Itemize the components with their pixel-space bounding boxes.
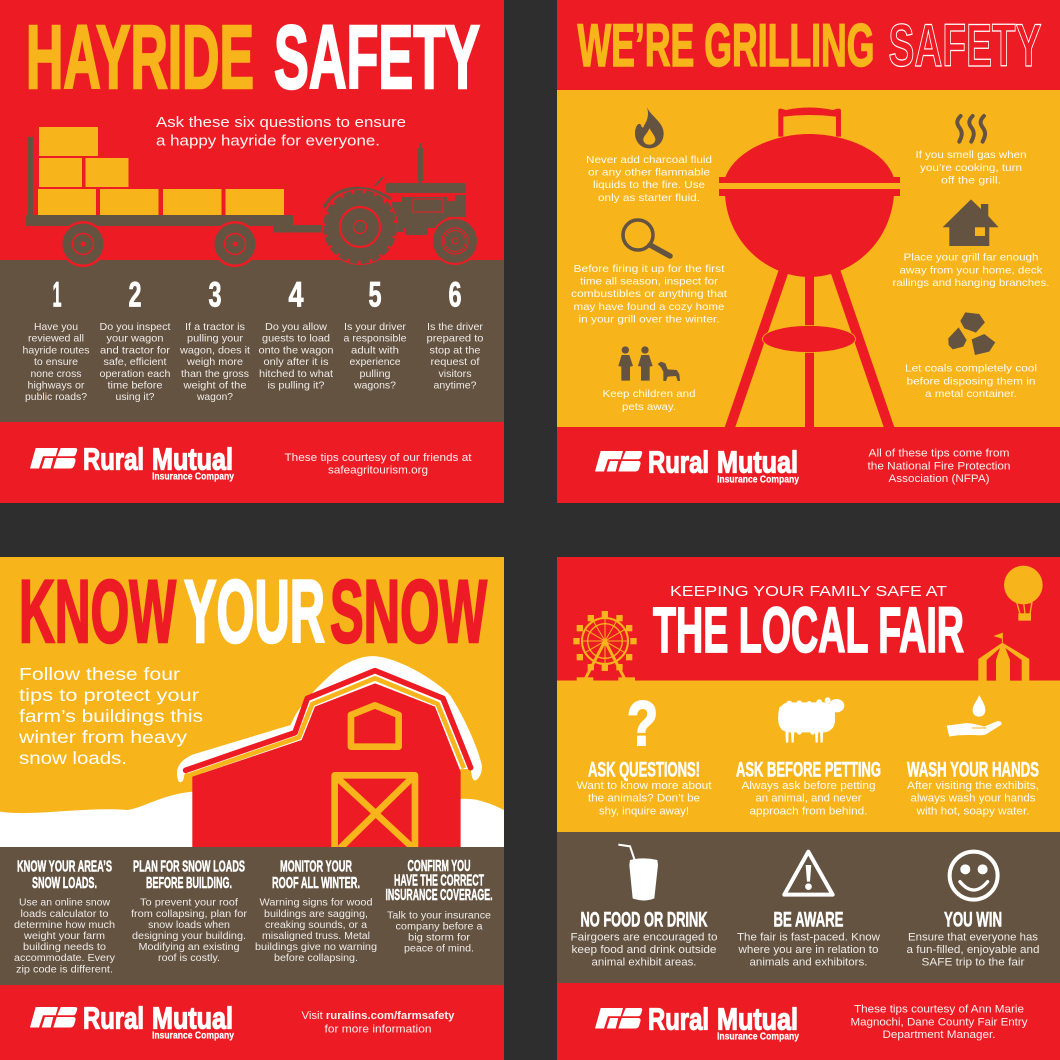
tip: you win: SAFE trip to the fair	[922, 956, 1025, 968]
intro text	[18, 664, 203, 768]
tip 4: insurance coverage: CONFIRM YOU	[408, 858, 470, 875]
tip: smell gas: you’re cooking, turn	[920, 162, 1022, 174]
tip: ask before petting: approach from behind.	[750, 806, 868, 818]
tip 3: monitor roof: buildings give no warning	[255, 942, 377, 953]
tip: inspect grill	[571, 263, 727, 325]
numbers	[52, 276, 462, 314]
snow on roof	[177, 656, 482, 782]
tip 1: snow loads	[14, 858, 115, 975]
tip: charcoal fluid: liquids to the fire. Use	[593, 179, 705, 191]
title: know your snow: SNOW	[330, 561, 487, 661]
question 1: hayride routes	[22, 345, 90, 356]
question 3: than the gross	[181, 369, 249, 380]
title: know your snow: KNOW	[19, 561, 176, 661]
question 4: hitched to what	[259, 369, 333, 380]
grill legs	[729, 270, 890, 430]
tip 3: monitor roof: misaligned truss. Metal	[262, 931, 370, 942]
tip: children and pets: Keep children and	[602, 388, 696, 400]
six numbered questions	[22, 276, 484, 403]
tip 3: monitor roof: buildings are sagging,	[264, 909, 368, 920]
title: hayride safety: HAYRIDE	[26, 8, 254, 108]
tip: no food or drink: animal exhibit areas.	[592, 956, 696, 968]
tip: be aware: where you are in relation to	[737, 944, 878, 956]
tip 1: snow loads: weight your farm	[23, 931, 105, 942]
tip: wash your hands: After visiting the exhibits,	[907, 780, 1039, 792]
wagon	[26, 137, 323, 267]
footer credit: Department Manager.	[882, 1029, 996, 1041]
tip 1: snow loads: determine how much	[14, 920, 115, 931]
tip: children and pets	[602, 388, 696, 413]
logo: rural mutual: Insurance Company	[717, 474, 799, 486]
tip: coals	[905, 363, 1037, 400]
footer link	[302, 1010, 455, 1035]
numbers: 1	[52, 276, 62, 314]
loft window	[351, 705, 399, 747]
question 5: a responsible	[344, 334, 407, 345]
tip: ask before petting	[736, 758, 881, 818]
question 1: Have you	[34, 322, 78, 333]
icon: children and dog	[618, 346, 680, 381]
title: hayride safety: SAFETY	[274, 8, 480, 108]
tip: coals: a metal container.	[925, 388, 1017, 400]
tip: inspect grill: Before firing it up for the first	[574, 263, 725, 275]
footer credit	[850, 1004, 1028, 1041]
question 2: your wagon	[106, 334, 164, 345]
logo: rural mutual: Insurance Company	[152, 1030, 234, 1042]
tip 2: plan for snow loads: from collapsing, plan for	[131, 909, 248, 920]
footer credit: These tips courtesy of Ann Marie	[854, 1004, 1024, 1016]
tip: wash your hands: with hot, soapy water.	[915, 806, 1030, 818]
tip: inspect grill: may have found a cozy home	[574, 301, 725, 313]
tip: ask before petting: Always ask before petting	[742, 780, 876, 792]
question 2: using it?	[116, 392, 155, 403]
question 6	[426, 322, 484, 392]
question 3: wagon, does it	[179, 345, 250, 356]
question 1: public roads?	[25, 392, 87, 403]
question 6: stop at the	[430, 345, 481, 356]
tip: charcoal fluid: only as starter fluid.	[598, 192, 700, 204]
tip 4: insurance coverage: company before a	[396, 921, 483, 932]
question 3: If a tractor is	[185, 322, 245, 333]
grill lid and bowl	[719, 134, 900, 277]
tip 1: snow loads: Use an online snow	[19, 898, 111, 909]
question 4: Do you allow	[265, 322, 328, 333]
tip 3: monitor roof: MONITOR YOUR	[280, 858, 352, 876]
tip: smell gas	[916, 149, 1027, 186]
title: know your snow	[19, 561, 487, 661]
tip 1: snow loads: KNOW YOUR AREA’S	[17, 858, 112, 876]
intro text: Follow these four	[19, 664, 180, 684]
tip 1: snow loads: SNOW LOADS.	[32, 875, 97, 892]
footer credit: Magnochi, Dane County Fair Entry	[850, 1016, 1028, 1028]
tip: inspect grill: combustibles or anything that	[571, 288, 727, 300]
question 1	[22, 322, 90, 403]
tip 4: insurance coverage: INSURANCE COVERAGE.	[386, 887, 492, 904]
logo: rural mutual: Rural	[83, 442, 144, 476]
title: know your snow: YOUR	[184, 561, 325, 661]
question 5: Is your driver	[344, 322, 407, 333]
tip 1: snow loads: zip code is different.	[16, 964, 113, 975]
tip 1: snow loads: building needs to	[23, 942, 106, 953]
intro text: snow loads.	[19, 748, 127, 768]
footer credit: Association (NFPA)	[888, 473, 990, 485]
roof stripes	[190, 678, 464, 775]
tip: children and pets: pets away.	[622, 401, 676, 413]
tip: ask before petting: an animal, and never	[756, 793, 862, 805]
tip: be aware: BE AWARE	[774, 908, 844, 932]
numbers: 2	[128, 276, 142, 314]
question 2	[100, 322, 171, 403]
heading: KEEPING YOUR FAMILY SAFE AT	[670, 583, 947, 600]
tip 2: plan for snow loads: Modifying an existing	[138, 942, 240, 953]
tip: no food or drink	[570, 908, 718, 968]
panel: local fair	[557, 557, 1060, 1060]
numbers: 6	[448, 276, 462, 314]
tip: you win: Ensure that everyone has	[908, 932, 1039, 944]
tip: charcoal fluid: or any other flammable	[588, 167, 710, 179]
panel: hayride safety	[0, 0, 504, 503]
subtitle	[156, 115, 406, 150]
tip: ask questions: shy, inquire away!	[599, 806, 689, 818]
logo: rural mutual: Insurance Company	[717, 1032, 799, 1042]
tip 3: monitor roof: Warning signs for wood	[260, 898, 372, 909]
logo: rural mutual	[30, 442, 234, 482]
tip 2: plan for snow loads: designing your building.	[132, 931, 246, 942]
question 5: pulling	[360, 369, 391, 380]
tip 4: insurance coverage: Talk to your insurance	[387, 910, 491, 921]
logo: rural mutual	[595, 446, 799, 486]
tip: ask questions	[576, 758, 712, 818]
tip: coals: Let coals completely cool	[905, 363, 1037, 375]
subtitle: a happy hayride for everyone.	[156, 134, 380, 150]
icon: cup with straw	[618, 845, 658, 900]
tip 2: plan for snow loads: roof is costly.	[158, 953, 220, 964]
barn in snow	[0, 656, 504, 848]
icon: flame	[635, 107, 664, 148]
question 6: Is the driver	[427, 322, 484, 333]
question 4	[258, 322, 334, 392]
hay bales	[38, 127, 284, 215]
tip: charcoal fluid	[586, 154, 712, 204]
footer link: Visit ruralins.com/farmsafety	[302, 1010, 455, 1022]
tip 1: snow loads: loads calculator to	[20, 909, 108, 920]
tip 2: plan for snow loads: To prevent your roof	[140, 898, 238, 909]
tip: inspect grill: in your grill over the winter.	[578, 313, 720, 325]
tip: ask questions: ASK QUESTIONS!	[588, 758, 700, 782]
logo: rural mutual: Insurance Company	[152, 472, 234, 482]
tip 2: plan for snow loads: snow loads when	[148, 920, 230, 931]
numbers: 3	[208, 276, 222, 314]
footer credit	[284, 452, 472, 476]
logo: rural mutual: Rural	[648, 446, 709, 480]
tip: place grill	[892, 252, 1050, 289]
footer link: for more information	[324, 1023, 432, 1035]
footer credit: the National Fire Protection	[868, 460, 1010, 472]
panel: grilling safety	[557, 0, 1060, 503]
icon: sheep	[778, 697, 844, 743]
question 1: none cross	[30, 369, 82, 380]
barn body	[192, 683, 461, 847]
tip: coals: before disposing them in	[906, 375, 1036, 387]
tip 2: plan for snow loads	[131, 858, 248, 964]
question 5	[344, 322, 407, 392]
tip: wash your hands: always wash your hands	[910, 793, 1036, 805]
tip: place grill: railings and hanging branches.	[892, 277, 1050, 289]
heading	[653, 583, 964, 666]
tip 2: plan for snow loads: BEFORE BUILDING.	[146, 875, 232, 892]
question 2: safe, efficient	[104, 357, 167, 368]
tip 3: monitor roof: ROOF ALL WINTER.	[272, 875, 360, 892]
tip: charcoal fluid: Never add charcoal fluid	[586, 154, 712, 166]
icon: hot air balloon	[1004, 566, 1043, 621]
panel: know your snow	[0, 557, 504, 1060]
question 4: only after it is	[264, 357, 328, 368]
tip: ask questions: the animals? Don’t be	[588, 793, 700, 805]
question 1: reviewed all	[28, 334, 84, 345]
question 3: weight of the	[182, 380, 247, 392]
tip 1: snow loads: accommodate. Every	[14, 953, 115, 964]
grill	[719, 107, 900, 430]
question 3: pulling your	[187, 334, 244, 345]
tip: you win	[906, 908, 1040, 968]
tip: wash your hands	[907, 758, 1039, 818]
question 5: experience	[350, 357, 401, 368]
tip 3: monitor roof	[255, 858, 377, 964]
tip 3: monitor roof: creaking sounds, or a	[265, 920, 368, 931]
question 2: time before	[108, 380, 163, 392]
icon: coals	[948, 312, 995, 355]
tip: place grill: away from your home, deck	[900, 264, 1043, 276]
question 1: highways or	[28, 380, 85, 392]
tip: no food or drink: NO FOOD OR DRINK	[580, 908, 708, 932]
tractor	[322, 143, 479, 265]
tip 3: monitor roof: before collapsing.	[274, 953, 358, 964]
tip: no food or drink: keep food and drink outside	[572, 944, 716, 956]
question 6: prepared to	[426, 334, 484, 345]
icon: question mark: ?	[627, 689, 658, 759]
question 3: weigh more	[186, 357, 243, 368]
tip 4: insurance coverage: peace of mind.	[404, 944, 474, 955]
intro text: tips to protect your	[19, 685, 199, 705]
logo: rural mutual	[30, 1002, 234, 1042]
logo: rural mutual: Rural	[648, 1002, 709, 1036]
tip: place grill: Place your grill far enough	[904, 252, 1039, 264]
snow ground	[0, 792, 504, 847]
footer credit: These tips courtesy of our friends at	[284, 452, 472, 464]
question 5: wagons?	[353, 380, 396, 392]
question 2: operation each	[100, 369, 171, 380]
footer credit: All of these tips come from	[868, 448, 1010, 460]
tip: no food or drink: Fairgoers are encouraged to	[570, 932, 718, 944]
question 6: visitors	[438, 369, 472, 380]
logo: rural mutual: Rural	[83, 1002, 144, 1036]
intro text: winter from heavy	[18, 727, 187, 747]
intro text: farm’s buildings this	[19, 706, 203, 726]
grill handle	[778, 107, 841, 137]
icon: smiley	[950, 852, 998, 900]
tip: ask before petting: ASK BEFORE PETTING	[736, 758, 881, 782]
question 1: to ensure	[34, 357, 78, 368]
numbers: 4	[288, 276, 304, 314]
icon: gas waves	[957, 116, 985, 142]
subtitle: Ask these six questions to ensure	[156, 115, 406, 131]
tip: ask questions: Want to know more about	[576, 780, 712, 792]
icon: magnifying glass	[623, 220, 670, 256]
barn door	[335, 775, 415, 848]
tip: be aware: The fair is fast-paced. Know	[737, 932, 880, 944]
logo: rural mutual	[595, 1002, 799, 1042]
question 5: adult with	[351, 345, 399, 356]
tip: be aware	[737, 908, 880, 968]
logo: rural mutual: Mutual	[152, 1002, 233, 1036]
tip: inspect grill: time all season, inspect for	[580, 276, 719, 288]
question 3: wagon?	[196, 392, 233, 403]
logo: rural mutual: Mutual	[717, 446, 798, 480]
icon: house	[943, 199, 999, 246]
tip 4: insurance coverage: big storm for	[408, 932, 471, 944]
question 2: and tractor for	[100, 345, 171, 356]
icon: water drop and hand	[947, 695, 1002, 737]
logo: rural mutual: Mutual	[717, 1002, 798, 1036]
tip: you win: a fun-filled, enjoyable and	[906, 944, 1040, 956]
footer credit: safeagritourism.org	[328, 464, 428, 476]
tip 4: insurance coverage	[386, 858, 492, 955]
icon: circus tent	[978, 633, 1029, 681]
tip: smell gas: If you smell gas when	[916, 149, 1027, 161]
question 4: is pulling it?	[268, 380, 325, 392]
icon: warning triangle	[784, 852, 833, 895]
question 4: onto the wagon	[258, 345, 334, 356]
tip 4: insurance coverage: HAVE THE CORRECT	[394, 873, 484, 890]
tip: smell gas: off the grill.	[941, 174, 1001, 186]
logo: rural mutual: Mutual	[152, 442, 233, 476]
question 6: request of	[430, 357, 480, 368]
numbers: 5	[368, 276, 382, 314]
grill shelf	[762, 326, 856, 352]
question 3	[179, 322, 250, 403]
tip: you win: YOU WIN	[944, 908, 1002, 932]
tip 2: plan for snow loads: PLAN FOR SNOW LOADS	[133, 858, 245, 876]
icon: ferris wheel	[573, 611, 637, 681]
question 6: anytime?	[434, 380, 477, 392]
footer credit	[868, 448, 1010, 485]
tip: be aware: animals and exhibitors.	[750, 956, 868, 968]
question 2: Do you inspect	[100, 322, 171, 333]
question 4: guests to load	[262, 334, 330, 345]
